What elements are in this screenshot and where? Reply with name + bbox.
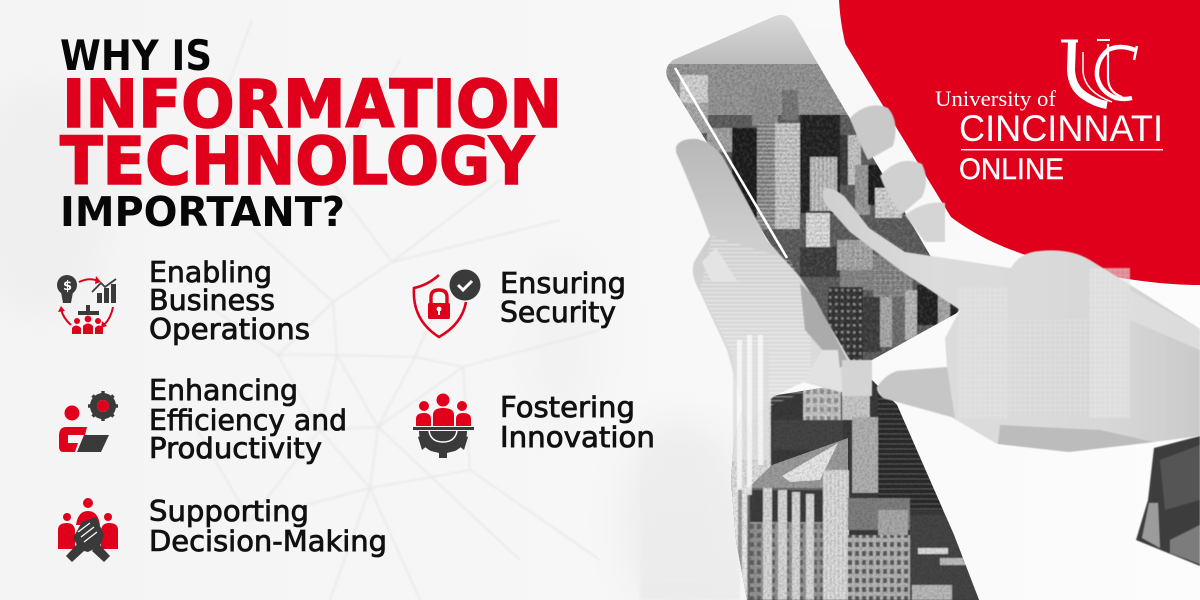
list item: supporting decision-making: Decision-Making (149, 525, 387, 558)
logo rule (961, 149, 1163, 150)
logo: university of: University of (935, 86, 1057, 111)
logo monogram (1061, 40, 1137, 105)
towers (680, 75, 962, 367)
panel: phone with city (666, 15, 960, 361)
list item: enabling business operations: Business (149, 284, 275, 317)
title line: technology: TECHNOLOGY (60, 123, 535, 200)
icon: business operations cycle (57, 275, 116, 334)
background haze (0, 80, 740, 600)
panel: bottom right city (1136, 436, 1200, 566)
panel: lower city inside arm (725, 375, 985, 600)
phone glass highlight (675, 68, 787, 258)
list item: enhancing efficiency and productivity: Efficiency and (149, 404, 347, 437)
distant city (666, 64, 851, 127)
left hand fingertips (850, 106, 945, 242)
list item: enhancing efficiency and productivity (149, 374, 347, 465)
icon: security shield (414, 270, 480, 337)
title (60, 31, 562, 236)
list item: ensuring security: Ensuring (500, 267, 626, 300)
right hand pointing (822, 188, 1200, 452)
logo: online: ONLINE (959, 153, 1064, 186)
logo: cincinnati: CINCINNATI (959, 108, 1163, 149)
list item: fostering innovation: Innovation (500, 421, 655, 454)
icon: team above gear (413, 394, 474, 458)
city base (725, 375, 985, 600)
mid building over hand (805, 350, 872, 396)
red corner panel (839, 0, 1200, 285)
list item: enhancing efficiency and productivity: Enhancing (149, 374, 298, 407)
logo: University of Cincinnati Online (935, 40, 1163, 186)
network line pattern (180, 20, 600, 600)
lower city texture (731, 388, 971, 600)
phone bezel strip (797, 27, 965, 240)
list item: enabling business operations: Enabling (149, 256, 272, 289)
city texture (660, 64, 970, 364)
list item: supporting decision-making: Supporting (149, 495, 309, 528)
list item: supporting decision-making (149, 495, 387, 558)
phone sky (666, 15, 822, 70)
fog skyline (640, 400, 740, 600)
list item: ensuring security: Security (500, 296, 616, 329)
title line: information: INFORMATION (62, 66, 562, 143)
left hand (676, 139, 872, 425)
main tower roof (748, 438, 848, 488)
hazy tower over hand (733, 335, 769, 495)
back buildings (725, 378, 945, 510)
city base (690, 115, 959, 361)
list item: fostering innovation: Fostering (500, 391, 635, 424)
icon: business operations cycle: $ (63, 279, 72, 294)
list item: enabling business operations (149, 256, 310, 346)
list item: enhancing efficiency and productivity: Productivity (149, 432, 322, 465)
list item: fostering innovation (500, 391, 655, 454)
list item: ensuring security (500, 267, 626, 329)
list item: enabling business operations: Operations (149, 313, 310, 346)
title line: why is: WHY IS (60, 31, 212, 80)
icon: team handshake (58, 498, 118, 562)
main tower (725, 470, 849, 600)
low buildings (848, 498, 980, 600)
icon: person at laptop with gear (59, 391, 118, 452)
title line: important: IMPORTANT? (60, 188, 345, 236)
